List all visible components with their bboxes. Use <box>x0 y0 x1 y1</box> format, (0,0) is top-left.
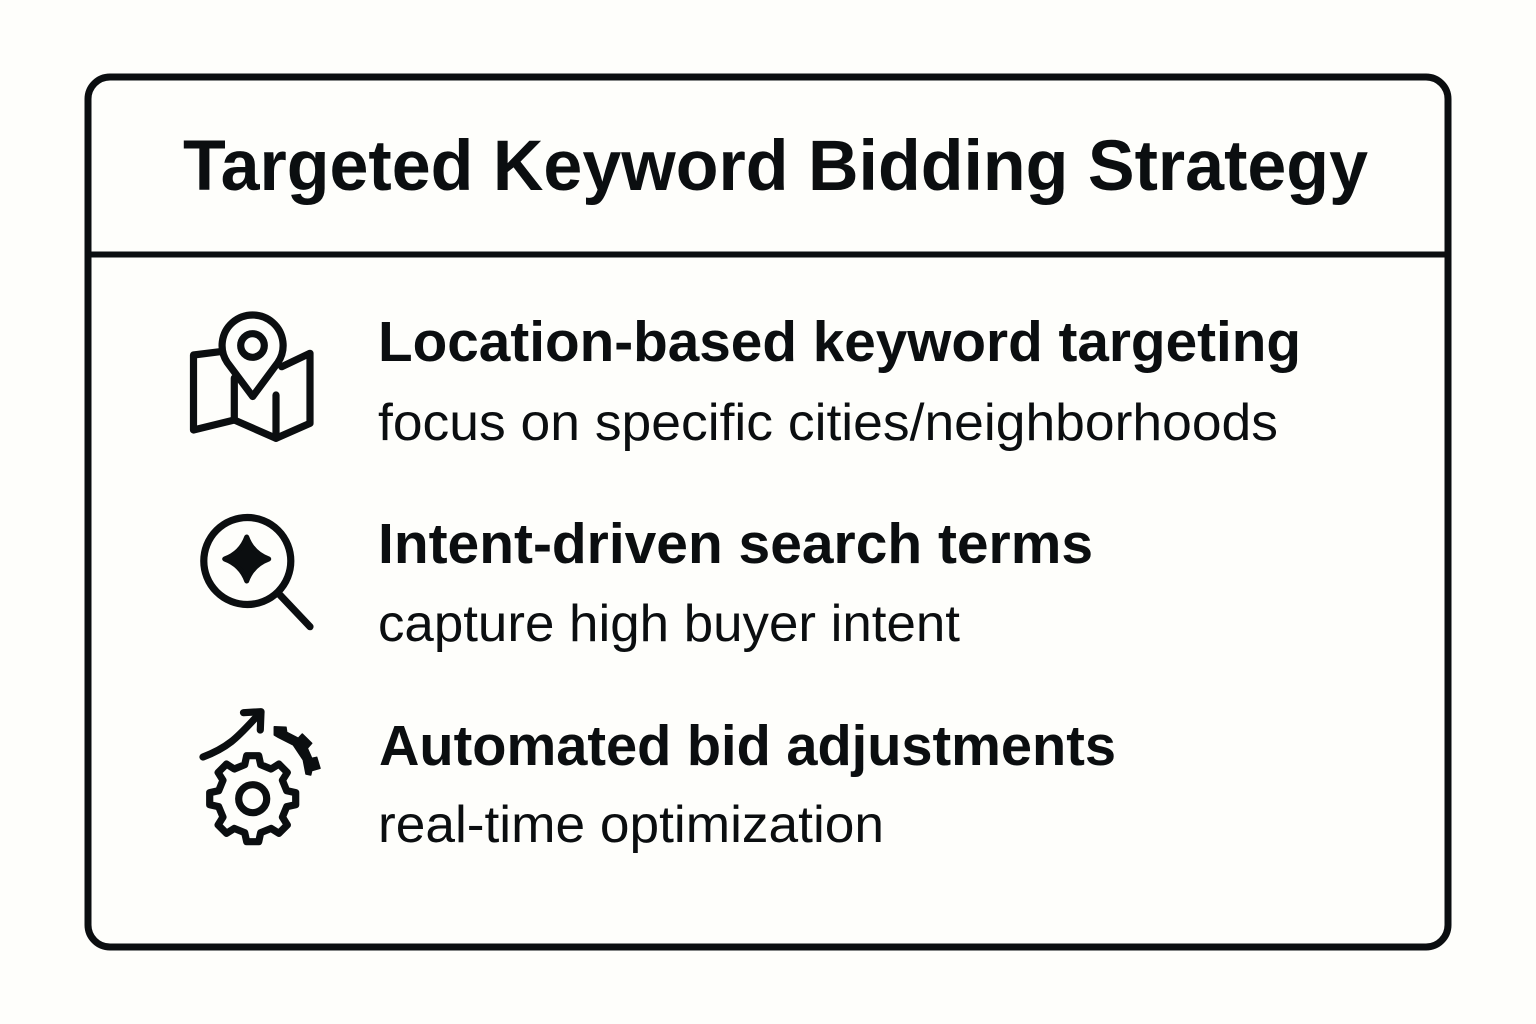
title: Targeted Keyword Bidding Strategy <box>183 127 1369 206</box>
heading: intent-driven search terms: Intent-driven search terms <box>378 512 1093 576</box>
icon: gear with rising arrow <box>203 712 320 842</box>
panel: card outline <box>88 77 1448 947</box>
icon: magnifier with sparkle <box>204 518 310 627</box>
text: automation description: real-time optimization <box>378 796 884 854</box>
text: intent description: capture high buyer intent <box>378 595 961 653</box>
icon: map with location pin <box>194 315 310 438</box>
heading: automated bid adjustments: Automated bid adjustments <box>379 714 1116 778</box>
heading: location-based keyword targeting: Location-based keyword targeting <box>378 310 1301 374</box>
text: location description: focus on specific cities/neighborhoods <box>378 394 1278 452</box>
